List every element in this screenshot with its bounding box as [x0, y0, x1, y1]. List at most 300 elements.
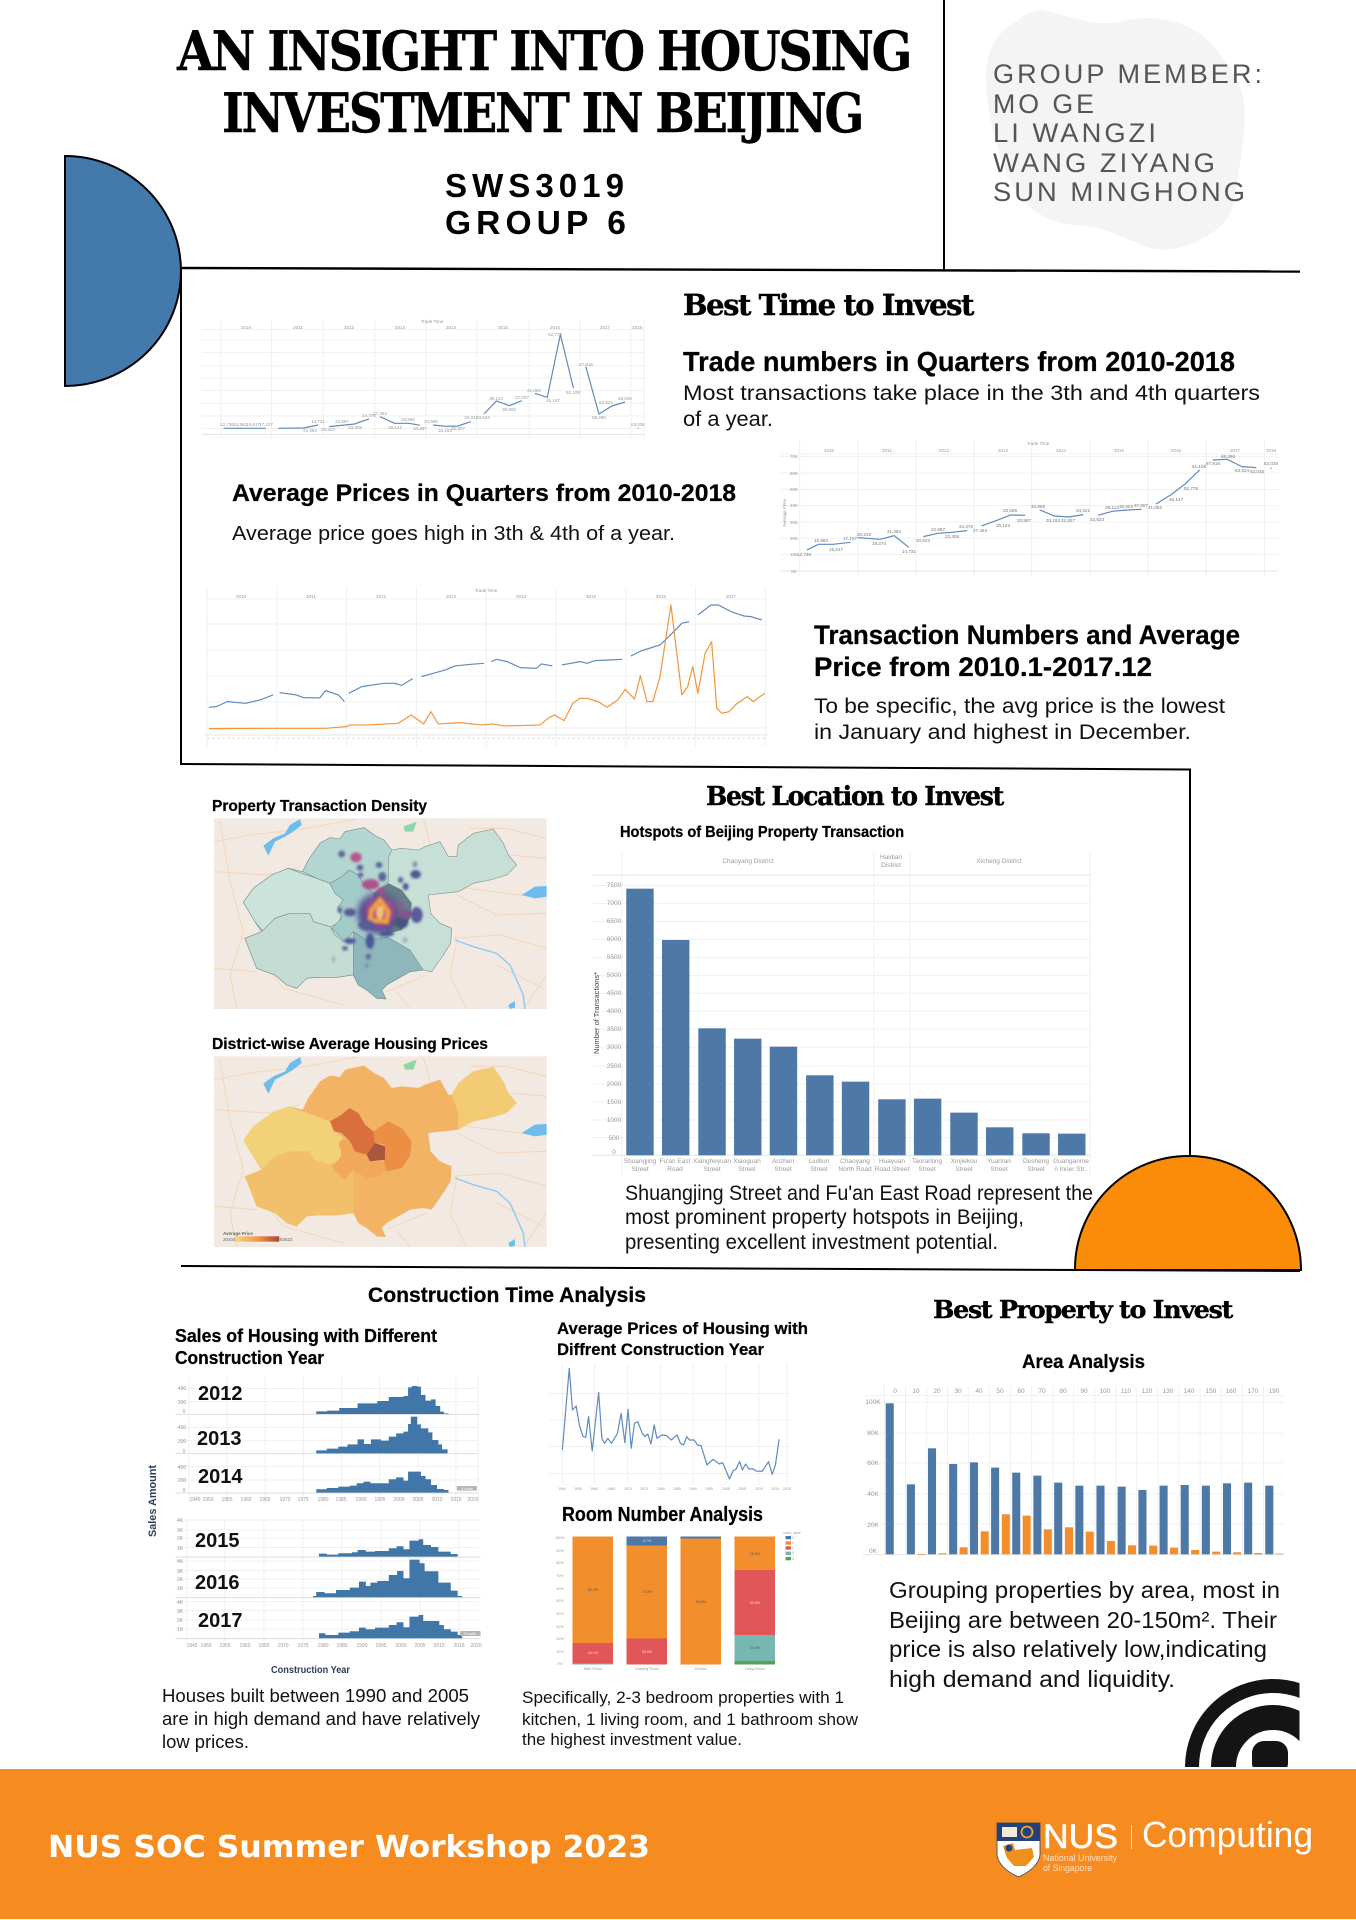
stacked bar chart: room number analysis: 25.9%: [750, 1552, 761, 1556]
line chart: average prices by quarter: 27,463: [973, 528, 987, 533]
histogram axis labels: 1970: [279, 1497, 291, 1503]
bar chart: hotspots of property transaction: Fu'an East: [660, 1158, 691, 1165]
text block: trade numbers: of a year.: [683, 408, 773, 431]
histograms: sales by construction year: [147, 1377, 482, 1676]
bar chart: hotspots of property transaction: 2000: [607, 1081, 622, 1088]
combined chart: transactions and average price: 2015: [586, 594, 597, 599]
stacked bar chart: room number analysis: 4: [792, 1557, 794, 1561]
line chart: average prices by quarter: 33,867: [1017, 518, 1031, 523]
bar chart: hotspots of property transaction: 2500: [607, 1063, 622, 1070]
histogram axis labels: 1985: [336, 1643, 348, 1649]
histogram axis labels: 1955: [221, 1497, 233, 1503]
line chart: average prices by quarter: 67,916: [1206, 461, 1220, 466]
bar chart: area analysis: 90: [1080, 1388, 1088, 1395]
line chart: average prices by quarter: 23,308: [945, 534, 959, 539]
line chart: average prices by quarter: 46,147: [1169, 497, 1183, 502]
line chart: trade numbers by quarter: 2012: [344, 325, 355, 330]
combined chart: transactions and average price: [205, 587, 768, 747]
heading: area analysis: Area Analysis: [1022, 1352, 1145, 1373]
line chart: average prices by quarter: 37,007: [1134, 503, 1148, 508]
bar chart: area analysis: 130: [1163, 1388, 1174, 1395]
line chart: trade numbers by quarter: 33,193: [438, 428, 452, 433]
text block: trade numbers: Trade numbers in Quarters from 2010-2018: [683, 346, 1235, 377]
bar chart: hotspots of property transaction: Street: [703, 1166, 721, 1173]
histogram axis labels: 400: [178, 1386, 186, 1392]
bar chart: hotspots of property transaction: 500: [609, 1135, 620, 1142]
heading: room number analysis: Room Number Analysis: [562, 1504, 763, 1526]
line chart: average prices by construction year: 1985: [673, 1487, 681, 1491]
histogram axis labels: 1950: [202, 1497, 214, 1503]
line chart: trade numbers by quarter: 36,803: [502, 407, 516, 412]
combined chart: transactions and average price: 2012: [376, 594, 387, 599]
bar chart: area analysis: 100: [1100, 1388, 1111, 1395]
bar chart: area analysis: 140: [1184, 1388, 1195, 1395]
line chart: average prices by quarter: 2010: [824, 448, 835, 453]
year labels: 2013: [197, 1428, 242, 1450]
section frame lines: [181, 0, 1300, 1271]
histogram axis labels: 2020: [467, 1497, 479, 1503]
year labels: 2015: [195, 1530, 240, 1552]
line chart: trade numbers by quarter: 37,007: [515, 395, 529, 400]
group members: GROUP MEMBER:: [993, 59, 1265, 89]
histogram axis labels: 1K: [177, 1627, 184, 1633]
text block: transaction numbers and average price: [814, 620, 1240, 744]
course and group: [445, 167, 631, 241]
decorative blob behind group members: [986, 10, 1245, 250]
footer band: [0, 1769, 1356, 1919]
line chart: average prices by quarter: 32,827: [1061, 518, 1075, 523]
bar chart: hotspots of property transaction: 6000: [607, 936, 622, 943]
histograms: sales by construction year: Sales Amount: [147, 1465, 159, 1537]
stacked bar chart: room number analysis: 2: [792, 1546, 794, 1550]
histogram axis labels: 400: [178, 1425, 186, 1431]
histogram axis labels: 4K: [177, 1518, 184, 1524]
combined chart: transactions and average price: 2011: [306, 594, 316, 599]
line chart: trade numbers by quarter: 21,384: [303, 428, 317, 433]
NUS Computing logo: [997, 1814, 1313, 1877]
histogram axis labels: 200: [178, 1439, 186, 1445]
bar chart: area analysis: 0: [893, 1388, 897, 1395]
bar chart: hotspots of property transaction: Street: [955, 1166, 973, 1173]
bar chart: hotspots of property transaction: 4000: [607, 1008, 622, 1015]
histogram axis labels: 1955: [219, 1643, 231, 1649]
heading: sales of housing: [175, 1326, 437, 1368]
line chart: average prices by quarter: 36,113: [1105, 505, 1119, 510]
bar chart: hotspots of property transaction: n Inner Str..: [1054, 1166, 1088, 1173]
histogram axis labels: 0: [183, 1409, 186, 1415]
histogram axis labels: 2K: [177, 1577, 184, 1583]
line chart: average prices by quarter: 61,109: [1192, 464, 1206, 469]
histograms: sales by construction year: Construction Year: [271, 1665, 350, 1676]
histogram axis labels: 2010: [433, 1643, 445, 1649]
text block: hotspots caption: [625, 1181, 1093, 1254]
line chart: average prices by quarter: 33,623: [1090, 517, 1104, 522]
histogram axis labels: 400: [178, 1465, 186, 1471]
year labels: [195, 1383, 243, 1632]
bar chart: area analysis: 20K: [867, 1522, 879, 1529]
bar chart: hotspots of property transaction: 3000: [607, 1044, 622, 1051]
line chart: average prices by quarter: Average Price: [782, 498, 787, 527]
histogram axis labels: 1K: [177, 1546, 184, 1552]
histogram axis labels: [177, 1386, 482, 1649]
text block: sales caption: [162, 1686, 480, 1752]
bar chart: area analysis: 60K: [867, 1460, 879, 1467]
histogram axis labels: 2015: [453, 1643, 465, 1649]
group members: WANG ZIYANG: [993, 148, 1218, 178]
text block: room number caption: [522, 1689, 858, 1749]
line chart: trade numbers by quarter: 17,107: [259, 422, 273, 427]
line chart: average prices by quarter: Trade Time: [1027, 441, 1050, 446]
stacked bar chart: room number analysis: 20.5%: [642, 1650, 653, 1654]
histogram axis labels: 1965: [259, 1497, 271, 1503]
stacked bar chart: room number analysis: 90%: [556, 1549, 564, 1553]
histogram axis labels: 1945: [189, 1497, 201, 1503]
line chart: average prices by quarter: 2017: [1230, 448, 1241, 453]
bar chart: hotspots of property transaction: Guanganme: [1053, 1158, 1089, 1165]
histogram axis labels: 1960: [240, 1497, 252, 1503]
bar chart: hotspots of property transaction: 5500: [607, 954, 622, 961]
bar chart: area analysis: 160: [1226, 1388, 1237, 1395]
stacked bar chart: room number analysis: 70%: [556, 1574, 564, 1578]
bar chart: hotspots of property transaction: Street: [990, 1166, 1008, 1173]
bar chart: area analysis: [863, 1386, 1284, 1555]
histogram axis labels: 1980: [317, 1643, 329, 1649]
stacked bar chart: room number analysis: 40%: [556, 1612, 564, 1616]
orange half circle: [1075, 1156, 1301, 1270]
stacked bar chart: room number analysis: 6.7%: [643, 1539, 652, 1543]
line chart: average prices by quarter: 24,476: [959, 524, 973, 529]
stacked bar chart: room number analysis: 20%: [556, 1637, 564, 1641]
text block: average prices: Average Prices in Quarters from 2010-2018: [232, 480, 736, 507]
line chart: average prices by construction year: 1980: [657, 1487, 665, 1491]
line chart: trade numbers by quarter: 52,778: [548, 332, 562, 337]
line chart: average prices by quarter: 33,193: [1046, 518, 1060, 523]
line chart: average prices by quarter: 22,687: [931, 527, 945, 532]
line chart: average prices by quarter: 60K: [790, 471, 798, 476]
histogram axis labels: 2005: [414, 1643, 426, 1649]
histogram axis labels: 2K: [177, 1536, 184, 1542]
bar chart: area analysis: 110: [1121, 1388, 1132, 1395]
bar chart: area analysis: 70: [1038, 1388, 1046, 1395]
line chart: average prices by quarter: 19,274: [872, 541, 886, 546]
line chart: average prices by quarter: 0K: [791, 569, 797, 574]
bar chart: hotspots of property transaction: Xiaoguan: [733, 1158, 761, 1165]
map: district-wise average housing prices: Average Price: [223, 1231, 253, 1236]
bar chart: area analysis: 50: [996, 1388, 1004, 1395]
line chart: average prices by quarter: 15,617: [829, 547, 843, 552]
line chart: average prices by construction year: [550, 1363, 791, 1491]
bar chart: hotspots of property transaction: Xiangheyuan: [693, 1158, 731, 1165]
heading: hotspots: Hotspots of Beijing Property Transaction: [620, 824, 904, 841]
line chart: average prices by quarter: 68,286: [1221, 454, 1235, 459]
line chart: trade numbers by quarter: 32,827: [451, 426, 465, 431]
line chart: trade numbers by quarter: 63,524: [599, 400, 613, 405]
bar chart: hotspots of property transaction: Taoranting: [912, 1158, 943, 1165]
stacked bar chart: room number analysis: 72.3%: [642, 1590, 653, 1594]
bar chart: area analysis: 0K: [869, 1548, 878, 1555]
line chart: trade numbers by quarter: 20,623: [321, 427, 335, 432]
stacked bar chart: room number analysis: Kitchen: [695, 1667, 707, 1671]
blue half circle: [65, 156, 181, 386]
histogram axis labels: 2010: [431, 1497, 443, 1503]
group members: LI WANGZI: [993, 118, 1159, 148]
line chart: average prices by quarter: 2016: [1171, 448, 1182, 453]
line chart: trade numbers by quarter: 33,623: [476, 415, 490, 420]
map: district-wise average housing prices: 20304: [223, 1237, 236, 1242]
line chart: trade numbers by quarter: 33,867: [413, 426, 427, 431]
line chart: average prices by construction year: 1960: [590, 1487, 598, 1491]
NUS Computing logo: National University: [1043, 1853, 1117, 1864]
bar chart: hotspots of property transaction: Desheng: [1023, 1158, 1049, 1165]
histogram axis labels: 1975: [297, 1497, 309, 1503]
bar chart: hotspots of property transaction: North Road: [838, 1166, 872, 1173]
text block: hotspots caption: most prominent property hotspots in Beijing,: [625, 1205, 1024, 1229]
combined chart: transactions and average price: 2017: [726, 594, 737, 599]
line chart: average prices by quarter: 30,123: [996, 523, 1010, 528]
stacked bar chart: room number analysis: 0: [792, 1536, 794, 1540]
year labels: 2016: [195, 1572, 240, 1594]
bar chart: hotspots of property transaction: Haidian: [880, 854, 902, 861]
line chart: trade numbers by quarter: 27,463: [373, 411, 387, 416]
line chart: trade numbers by quarter: Trade Time: [421, 319, 444, 324]
stacked bar chart: room number analysis: 16.1%: [588, 1651, 599, 1655]
bar chart: hotspots of property transaction: Anzhen: [772, 1158, 794, 1165]
line chart: average prices by construction year: 2005: [738, 1487, 746, 1491]
bar chart: area analysis: 40: [975, 1388, 983, 1395]
group members: SUN MINGHONG: [993, 177, 1248, 207]
bar chart: hotspots of property transaction: 1000: [607, 1117, 622, 1124]
histogram axis labels: 1990: [356, 1643, 368, 1649]
line chart: average prices by quarter: 2014: [1056, 448, 1067, 453]
heading: district-wise average housing prices: District-wise Average Housing Prices: [212, 1036, 488, 1053]
line chart: trade numbers by quarter: 2016: [550, 325, 561, 330]
bar chart: hotspots of property transaction: Liulitun: [809, 1158, 830, 1165]
group members: MO GE: [993, 89, 1097, 119]
line chart: average prices by quarter: 12,736: [797, 552, 811, 557]
line chart: trade numbers by quarter: 33,655: [401, 417, 415, 422]
bar chart: hotspots of property transaction: Yuantan: [987, 1158, 1011, 1165]
histogram axis labels: 2020: [470, 1643, 482, 1649]
line chart: trade numbers by quarter: 36,113: [489, 396, 503, 401]
bar chart: area analysis: 80: [1059, 1388, 1067, 1395]
text block: average prices: Average price goes high in 3th & 4th of a year.: [232, 523, 675, 545]
text block: room number caption: the highest investment value.: [522, 1731, 742, 1749]
histogram axis labels: 2000: [395, 1643, 407, 1649]
text block: transaction numbers and average price: Price from 2010.1-2017.12: [814, 652, 1152, 682]
line chart: trade numbers by quarter: 67,916: [579, 362, 593, 367]
group members: [993, 59, 1265, 207]
line chart: trade numbers by quarter: 2018: [632, 325, 643, 330]
stacked bar chart: room number analysis: 80%: [556, 1561, 564, 1565]
line chart: average prices by construction year: 2015: [771, 1487, 779, 1491]
bar chart: hotspots of property transaction: Shuangjing: [624, 1158, 657, 1165]
bar chart: area analysis: 100K: [865, 1399, 881, 1406]
line chart: average prices by quarter: 63,046: [1250, 469, 1264, 474]
histogram axis labels: 3K: [177, 1609, 184, 1615]
course and group: GROUP 6: [445, 204, 631, 241]
stacked bar chart: room number analysis: 3: [792, 1551, 794, 1555]
text block: room number caption: Specifically, 2-3 bedroom properties with 1: [522, 1689, 844, 1707]
line chart: trade numbers by quarter: 2017: [600, 325, 611, 330]
text block: transaction numbers and average price: To be specific, the avg price is the lowest: [814, 695, 1225, 718]
stacked bar chart: room number analysis: Drawing Room: [635, 1667, 659, 1671]
line chart: average prices by quarter: 2015: [1114, 448, 1125, 453]
line chart: average prices by construction year: 2000: [722, 1487, 730, 1491]
line chart: average prices by quarter: 2011: [882, 448, 892, 453]
course and group: SWS3019: [445, 167, 629, 204]
histogram axis labels: 1990: [355, 1497, 367, 1503]
line chart: trade numbers by quarter: 63,046: [618, 396, 632, 401]
heading: average prices of housing: [557, 1319, 808, 1359]
line chart: trade numbers by quarter: [202, 319, 645, 439]
stacked bar chart: room number analysis: Bath Room: [584, 1667, 602, 1671]
line chart: average prices by quarter: 30K: [790, 520, 798, 525]
line chart: average prices by quarter: 2012: [939, 448, 950, 453]
text block: hotspots caption: presenting excellent investment potential.: [625, 1230, 998, 1254]
line chart: trade numbers by quarter: 30,123: [388, 425, 402, 430]
line chart: average prices by construction year: 2010: [755, 1487, 763, 1491]
histogram axis labels: 1965: [258, 1643, 270, 1649]
text block: sales caption: Houses built between 1990 and 2005: [162, 1686, 469, 1706]
text block: hotspots caption: Shuangjing Street and Fu'an East Road represent the: [625, 1181, 1093, 1205]
line chart: average prices by quarter: 14,731: [902, 549, 916, 554]
line chart: trade numbers by quarter: 61,109: [566, 390, 580, 395]
line chart: trade numbers by quarter: 63,036: [631, 422, 645, 427]
bar chart: hotspots of property transaction: 4500: [607, 990, 622, 997]
stacked bar chart: room number analysis: 82.3%: [588, 1588, 599, 1592]
line chart: average prices by quarter: 63,524: [1235, 468, 1249, 473]
text block: trade numbers: Most transactions take place in the 3th and 4th quarters: [683, 382, 1260, 405]
histogram axis labels: 1970: [277, 1643, 289, 1649]
title: AN INSIGHT INTO HOUSING: [176, 19, 910, 83]
line chart: trade numbers by quarter: 22,687: [335, 419, 349, 424]
line chart: average prices by quarter: 40K: [790, 503, 798, 508]
line chart: average prices by quarter: 20,218: [857, 532, 871, 537]
stacked bar chart: room number analysis: 10%: [556, 1650, 564, 1654]
histogram axis labels: 3K: [177, 1528, 184, 1534]
text block: sales caption: low prices.: [162, 1732, 249, 1752]
stacked bar chart: room number analysis: 60%: [556, 1587, 564, 1591]
bar chart: area analysis: 40K: [867, 1491, 879, 1498]
bar chart: hotspots of property transaction: Street: [774, 1166, 792, 1173]
heading: best location to invest: Best Location to Invest: [706, 782, 1004, 812]
line chart: trade numbers by quarter: 2010: [241, 325, 252, 330]
map: district-wise average housing prices: [214, 1056, 547, 1247]
text block: area caption: [889, 1577, 1280, 1692]
line chart: average prices by quarter: 2018: [1266, 448, 1277, 453]
bar chart: area analysis: 120: [1142, 1388, 1153, 1395]
line chart: average prices by construction year: 1950: [558, 1487, 566, 1491]
histogram axis labels: 200: [178, 1400, 186, 1406]
stacked bar chart: room number analysis: 100%: [555, 1536, 565, 1540]
line chart: trade numbers by quarter: 2013: [395, 325, 406, 330]
combined chart: transactions and average price: Trade Time: [475, 588, 498, 593]
bar chart: hotspots of property transaction: 3500: [607, 1026, 622, 1033]
icon: concentric rings: [1185, 1679, 1300, 1767]
line chart: average prices by quarter: 34,965: [1031, 504, 1045, 509]
line chart: trade numbers by quarter: 23,308: [348, 425, 362, 430]
histogram axis labels: 1995: [374, 1497, 386, 1503]
line chart: average prices by quarter: 36,803: [1119, 504, 1133, 509]
text block: area caption: Grouping properties by area, most in: [889, 1577, 1280, 1603]
map: district-wise average housing prices: 83522: [280, 1237, 293, 1242]
histogram axis labels: 4K: [177, 1600, 184, 1606]
histograms: sales by construction year: 4 nulls: [461, 1486, 473, 1491]
bar chart: hotspots of property transaction: [592, 851, 1091, 1176]
text block: sales caption: are in high demand and have relatively: [162, 1709, 480, 1729]
stacked bar chart: room number analysis: 0%: [557, 1662, 563, 1666]
histogram axis labels: 1975: [297, 1643, 309, 1649]
bar chart: area analysis: 190: [1269, 1388, 1280, 1395]
text block: trade numbers: [683, 346, 1260, 431]
stacked bar chart: room number analysis: 1: [792, 1541, 794, 1545]
line chart: average prices by construction year: 1955: [574, 1487, 582, 1491]
bar chart: hotspots of property transaction: Road: [667, 1166, 683, 1173]
bar chart: area analysis: 10: [912, 1388, 920, 1395]
bar chart: hotspots of property transaction: Street: [810, 1166, 828, 1173]
bar chart: hotspots of property transaction: 1500: [607, 1099, 622, 1106]
bar chart: area analysis: 150: [1206, 1388, 1217, 1395]
line chart: average prices by quarter: 41,062: [1148, 505, 1162, 510]
histogram axis labels: 200: [178, 1478, 186, 1484]
stacked bar chart: room number analysis: 50.5%: [750, 1601, 761, 1605]
bar chart: hotspots of property transaction: 6500: [607, 918, 622, 925]
text block: transaction numbers and average price: in January and highest in December.: [814, 721, 1191, 744]
text block: area caption: Beijing are between 20-150m². Their: [889, 1607, 1277, 1633]
line chart: average prices by quarter: 50K: [790, 487, 798, 492]
stacked bar chart: room number analysis: Living Room: [745, 1667, 765, 1671]
heading: best time to invest: Best Time to Invest: [683, 288, 975, 322]
heading: construction time analysis: Construction Time Analysis: [368, 1284, 646, 1307]
footer text: NUS SOC Summer Workshop 2023: [48, 1830, 650, 1865]
line chart: trade numbers by quarter: 34,341: [464, 415, 478, 420]
line chart: average prices by construction year: 1975: [640, 1487, 648, 1491]
text block: area caption: price is also relatively low,indicating: [889, 1636, 1267, 1662]
line chart: trade numbers by quarter: 2015: [498, 325, 509, 330]
bar chart: hotspots of property transaction: Chaoyang District: [722, 858, 774, 865]
bar chart: area analysis: 60: [1017, 1388, 1025, 1395]
line chart: trade numbers by quarter: 46,147: [546, 398, 560, 403]
map: property transaction density: [214, 818, 547, 1009]
line chart: average prices by quarter: 17,107: [843, 536, 857, 541]
bar chart: area analysis: 80K: [867, 1430, 879, 1437]
line chart: trade numbers by quarter: 68,286: [592, 415, 606, 420]
stacked bar chart: room number analysis: 20.3%: [750, 1646, 761, 1650]
histogram axis labels: 0: [183, 1488, 186, 1494]
bar chart: area analysis: 170: [1248, 1388, 1259, 1395]
title: INVESTMENT IN BEIJING: [222, 81, 862, 145]
line chart: trade numbers by quarter: 12,736: [220, 422, 234, 427]
line chart: average prices by construction year: 1990: [689, 1487, 697, 1491]
bar chart: hotspots of property transaction: Chaoyang: [840, 1158, 870, 1165]
line chart: trade numbers by quarter: 24,476: [362, 413, 376, 418]
histogram axis labels: 1980: [317, 1497, 329, 1503]
heading: property transaction density: Property Transaction Density: [212, 798, 427, 815]
bar chart: hotspots of property transaction: District: [881, 862, 901, 869]
heading: average prices of housing: Diffrent Construction Year: [557, 1340, 764, 1359]
line chart: trade numbers by quarter: 34,965: [424, 419, 438, 424]
line chart: average prices by quarter: 33,655: [1003, 508, 1017, 513]
histogram axis labels: 0: [183, 1449, 186, 1455]
stacked bar chart: room number analysis: room_style: [783, 1531, 801, 1535]
bar chart: hotspots of property transaction: Xinjiekou: [951, 1158, 978, 1165]
line chart: average prices by quarter: 2013: [998, 448, 1009, 453]
line chart: trade numbers by quarter: 2011: [293, 325, 303, 330]
text block: average prices: [232, 480, 736, 545]
histogram axis labels: 3K: [177, 1569, 184, 1575]
combined chart: transactions and average price: 2010: [236, 594, 247, 599]
stacked bar chart: room number analysis: [555, 1531, 801, 1671]
